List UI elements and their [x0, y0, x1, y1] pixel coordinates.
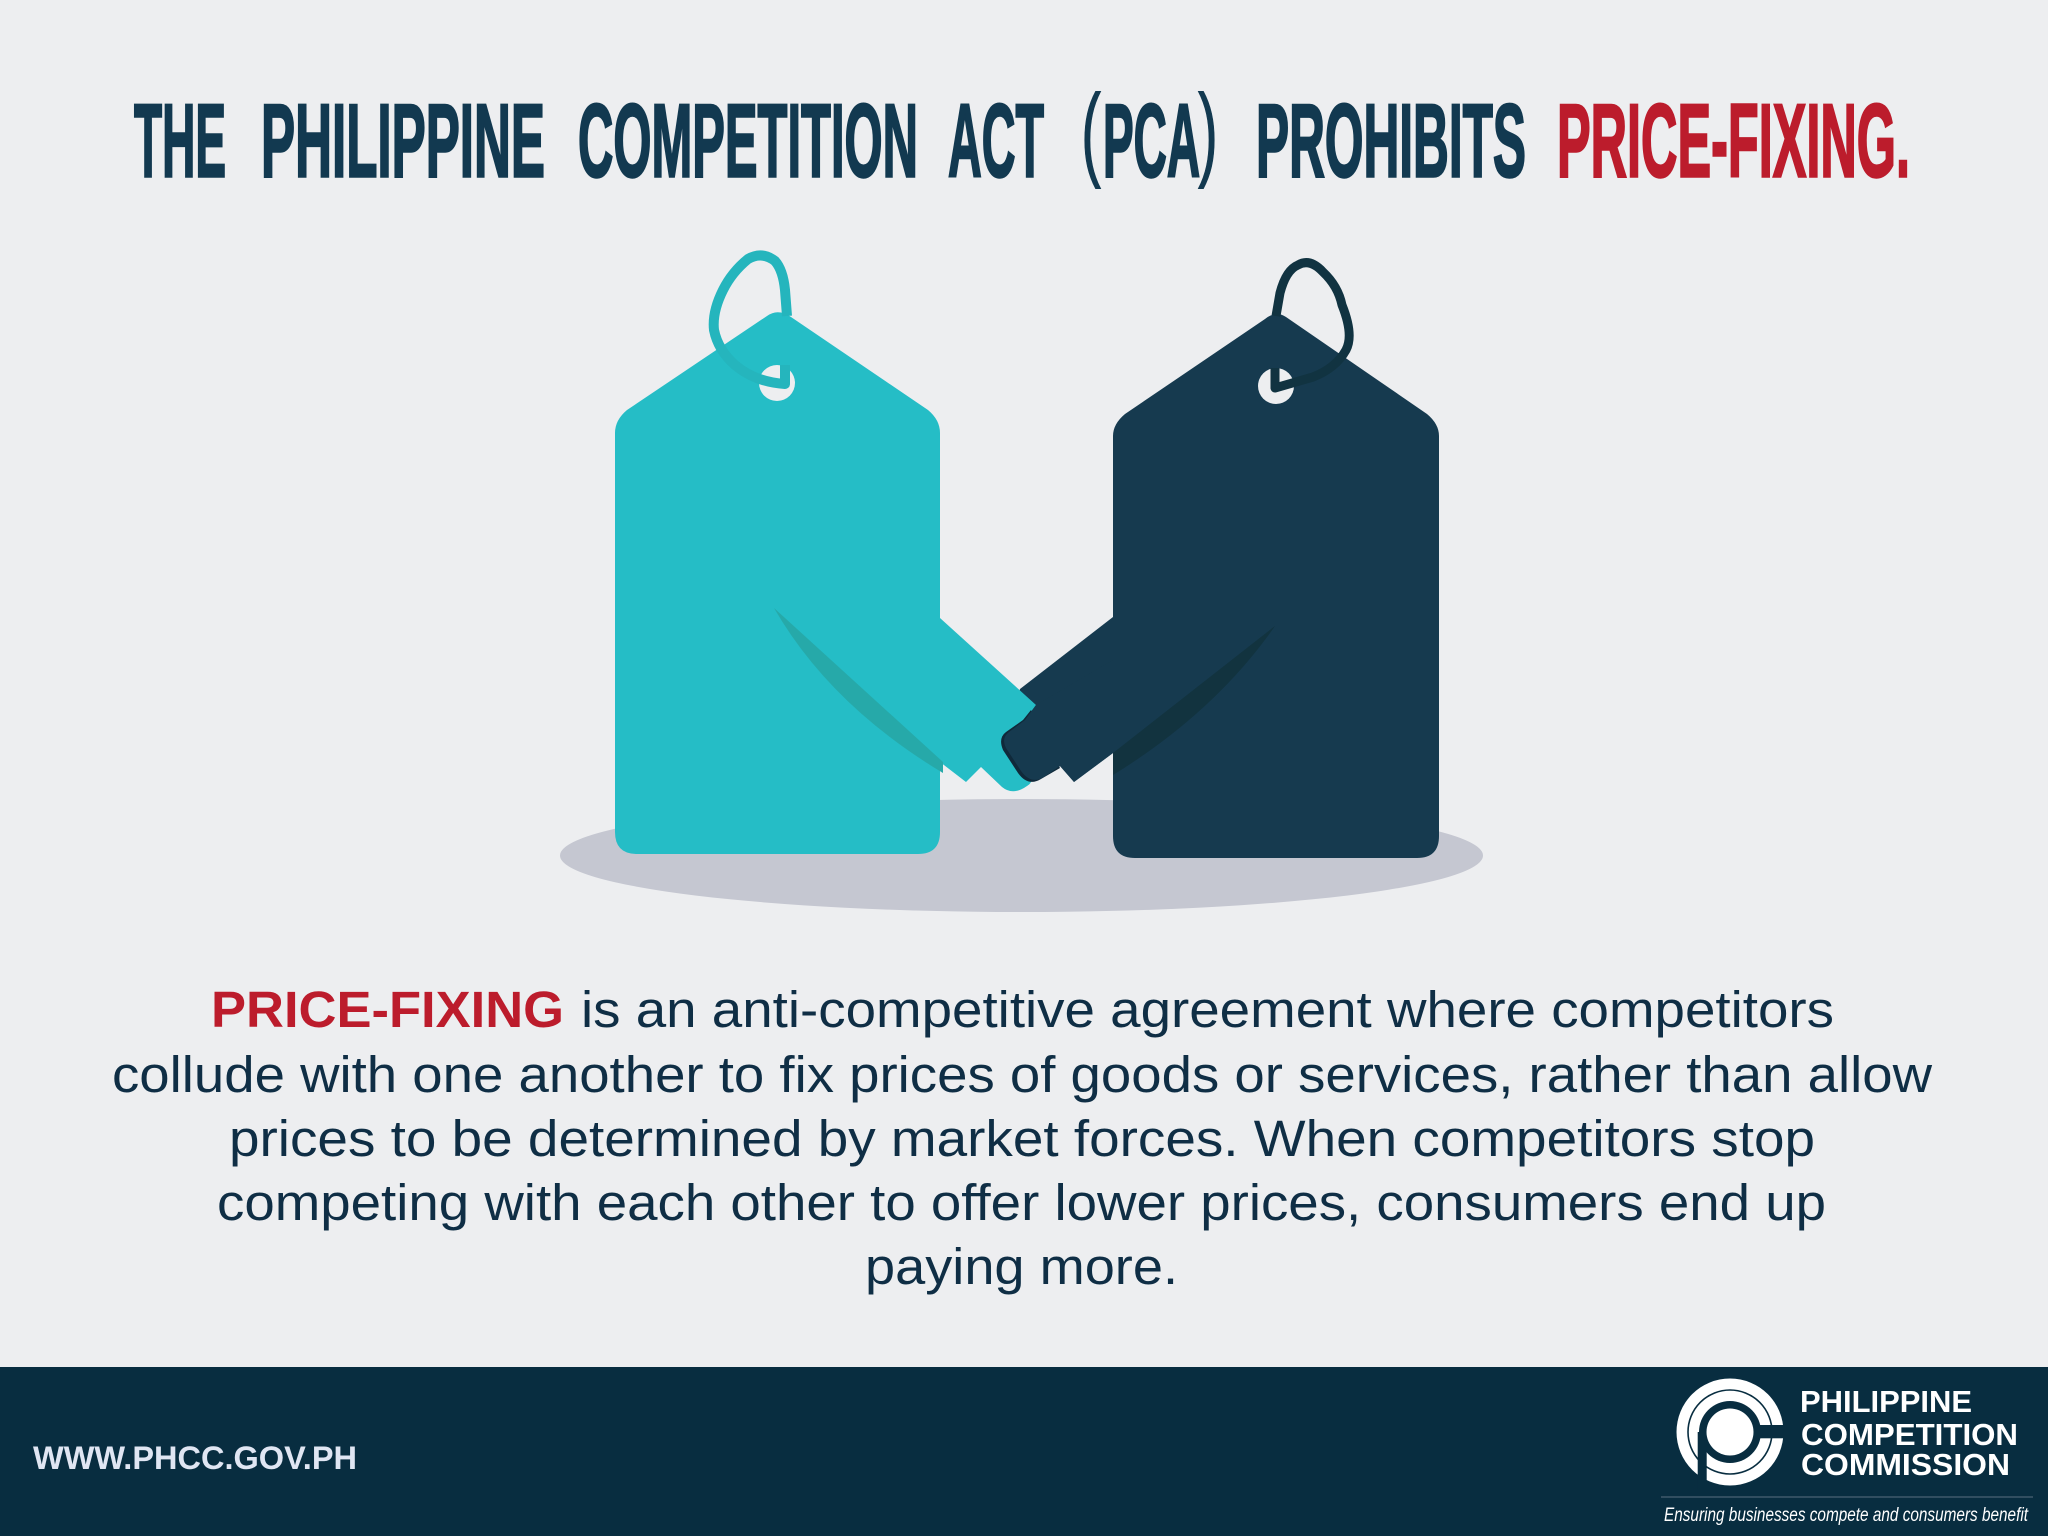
- logo wordmark: COMMISSION: [1801, 1447, 2010, 1482]
- title: PCA: [1103, 84, 1200, 200]
- title: ACT: [948, 84, 1044, 200]
- title: COMPETITION: [578, 84, 918, 200]
- description paragraph: paying more.: [865, 1238, 1178, 1295]
- description paragraph: collude with one another to fix prices of goods or services, rather than allow: [112, 1046, 1932, 1103]
- logo mark: [1676, 1378, 1790, 1490]
- title: PROHIBITS: [1256, 84, 1526, 200]
- navy arm crease: [1113, 626, 1275, 775]
- title: THE: [134, 84, 226, 200]
- description paragraph: competing with each other to offer lower prices, consumers end up: [217, 1174, 1826, 1231]
- description paragraph: prices to be determined by market forces. When competitors stop: [229, 1110, 1815, 1167]
- teal arm crease: [774, 608, 943, 773]
- title: PHILIPPINE: [261, 84, 545, 200]
- ground shadow: [560, 799, 1483, 912]
- description paragraph: PRICE-FIXING: [211, 981, 564, 1038]
- logo wordmark: [1800, 1384, 2018, 1482]
- teal price tag: [615, 255, 1036, 854]
- title: [134, 74, 1910, 200]
- logo wordmark: PHILIPPINE: [1800, 1384, 1972, 1419]
- navy price tag: [1005, 263, 1439, 858]
- description paragraph: [112, 981, 1932, 1295]
- logo wordmark: COMPETITION: [1801, 1417, 2018, 1452]
- title: ): [1198, 74, 1218, 190]
- website url: WWW.PHCC.GOV.PH: [33, 1440, 357, 1476]
- title: (: [1081, 74, 1101, 190]
- footer bar: [0, 1367, 2048, 1536]
- description paragraph: is an anti-competitive agreement where competitors: [581, 981, 1834, 1038]
- navy hand over teal hand: [1001, 660, 1113, 782]
- illustration: two price tags shaking hands: [560, 255, 1483, 912]
